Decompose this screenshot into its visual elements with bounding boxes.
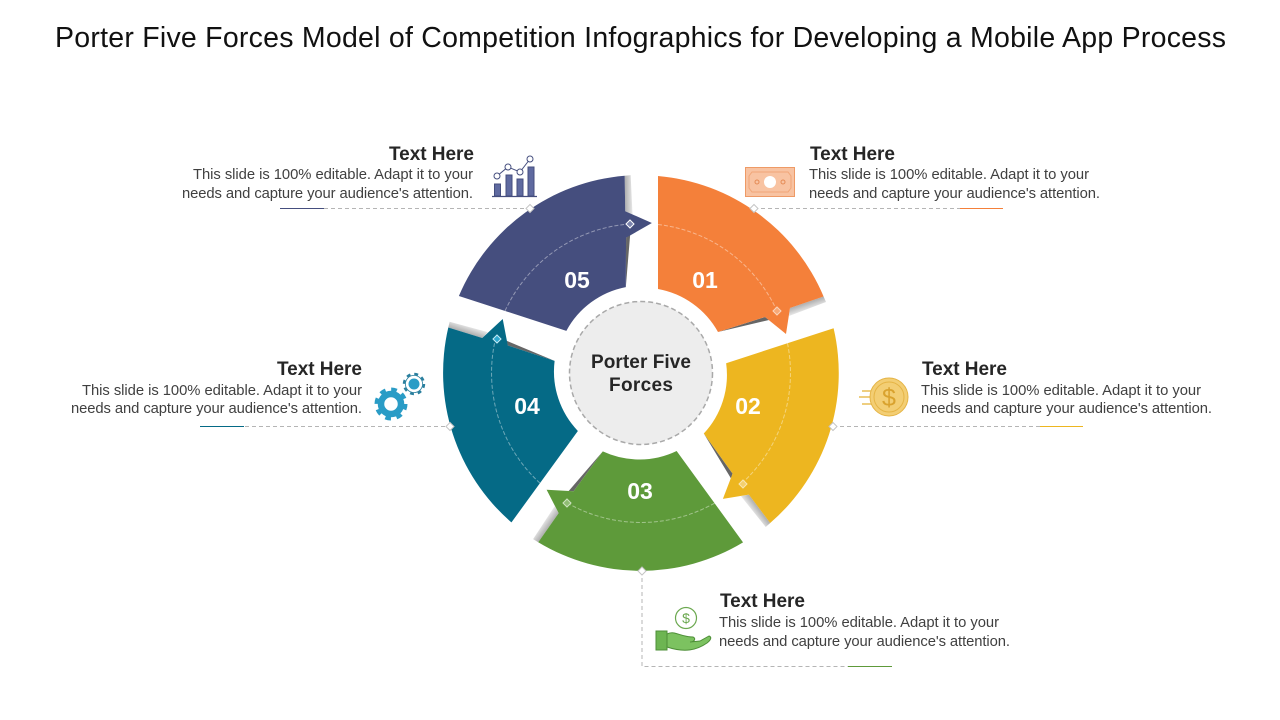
callout 04 <box>71 359 454 430</box>
callout 04: needs and capture your audience's attention. <box>71 401 362 417</box>
number 01: 01 <box>692 267 718 293</box>
callout 05 <box>182 144 534 212</box>
marker 01 <box>773 307 781 315</box>
center circle: Porter Five <box>591 352 691 373</box>
wedge 02 <box>683 328 886 537</box>
center circle: Forces <box>609 375 673 396</box>
icon: banknote <box>746 168 794 196</box>
callout 04: Text Here <box>277 359 362 380</box>
marker 05 <box>626 220 634 228</box>
icon: hand with coin <box>656 608 711 650</box>
wedge 01 <box>658 176 826 334</box>
number 02: 02 <box>735 393 761 419</box>
callout 02: needs and capture your audience's attention. <box>921 401 1212 417</box>
callout 01 <box>750 144 1100 212</box>
icon: dollar coin: $ <box>882 384 896 412</box>
callout 01: This slide is 100% editable. Adapt it to your <box>809 167 1089 183</box>
callout 05: Text Here <box>389 144 474 165</box>
wedge 05 <box>459 136 664 346</box>
callout 03 <box>638 567 1010 666</box>
marker 04 <box>493 335 501 343</box>
callout 05: This slide is 100% editable. Adapt it to your <box>193 167 473 183</box>
icon: gears <box>376 374 424 418</box>
panel: segment 01 <box>658 176 826 334</box>
panel: segment 04 <box>376 295 605 522</box>
panel: segment 03 <box>514 415 743 641</box>
panel: segment 02 <box>683 328 886 537</box>
callout 03: Text Here <box>720 591 805 612</box>
number 05: 05 <box>564 267 590 293</box>
icon: bar chart <box>492 156 537 196</box>
number 04: 04 <box>514 393 540 419</box>
number 03: 03 <box>627 478 653 504</box>
center circle <box>570 302 712 444</box>
wedge 04 <box>376 295 605 522</box>
icon: dollar coin <box>859 378 908 416</box>
wedge 03 <box>514 415 743 641</box>
marker 03 <box>563 499 571 507</box>
panel: segment 05 <box>459 136 664 346</box>
callout 03: needs and capture your audience's attention. <box>719 634 1010 650</box>
icon: hand with coin: $ <box>682 610 690 626</box>
callout 01: Text Here <box>810 144 895 165</box>
marker 02 <box>739 480 747 488</box>
callout 02 <box>829 359 1212 430</box>
callout 05: needs and capture your audience's attention. <box>182 186 473 202</box>
title: Porter Five Forces Model of Competition Infographics for Developing a Mobile App Process <box>55 22 1226 54</box>
callout 02: This slide is 100% editable. Adapt it to your <box>921 383 1201 399</box>
callout 04: This slide is 100% editable. Adapt it to your <box>82 383 362 399</box>
callout 02: Text Here <box>922 359 1007 380</box>
callout 03: This slide is 100% editable. Adapt it to your <box>719 615 999 631</box>
callout 01: needs and capture your audience's attention. <box>809 186 1100 202</box>
